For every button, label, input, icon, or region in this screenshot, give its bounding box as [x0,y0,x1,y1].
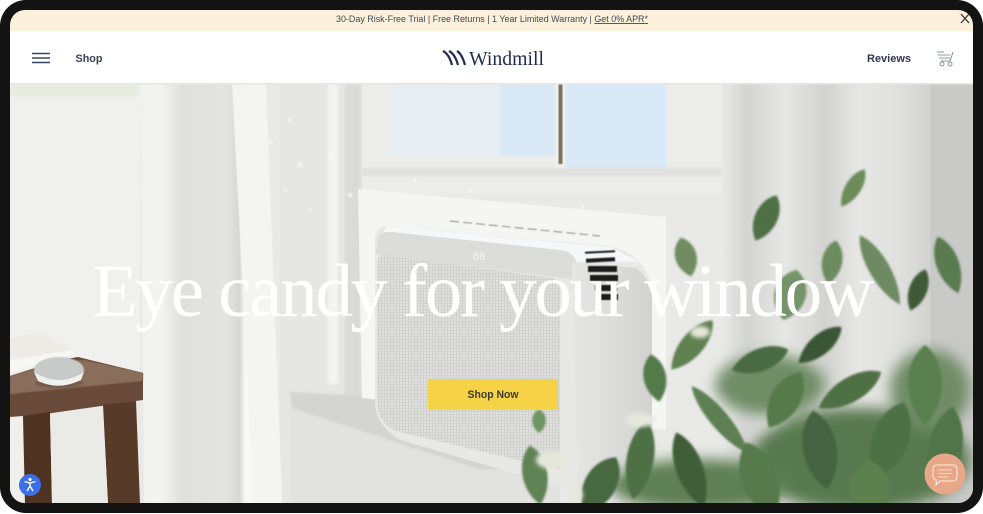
shop now button [428,379,558,410]
hamburger menu icon [32,54,50,62]
plant blossoms [536,326,710,503]
navigation bar [10,31,973,84]
smart speaker [34,357,84,388]
ac vents [585,250,618,300]
left curtain [146,84,254,503]
air conditioner body [375,226,650,470]
headline: Eye candy for your window [92,250,874,333]
ac surround panel [358,189,666,430]
sill [290,392,560,504]
cart icon [937,52,953,66]
close icon [961,14,969,23]
logo mark [443,51,465,65]
promo text: 30-Day Risk-Free Trial | Free Returns | 1 Year Limited Warranty | Get 0% APR* [336,14,648,24]
foreground plant [518,165,970,514]
ac grille [377,255,560,470]
shop now button: Shop Now [468,389,519,401]
top promo bar [10,10,973,31]
window frame [362,84,722,194]
wall left [10,84,140,384]
window glass right [566,84,666,168]
dark dashed gap above ac [450,221,600,236]
ac top highlight specks [268,118,584,212]
right curtains [722,84,930,504]
window glass left [390,84,500,156]
books on table [10,332,74,372]
logo wordmark: Windmill [469,48,544,70]
accessibility button [19,474,41,496]
chat button [924,454,966,494]
side table [10,357,143,504]
plant foliage mass [610,350,970,512]
plant leaves [518,165,969,514]
reviews link: Reviews [867,53,911,65]
shop link: Shop [76,53,103,65]
ac display: 68 [473,251,485,263]
